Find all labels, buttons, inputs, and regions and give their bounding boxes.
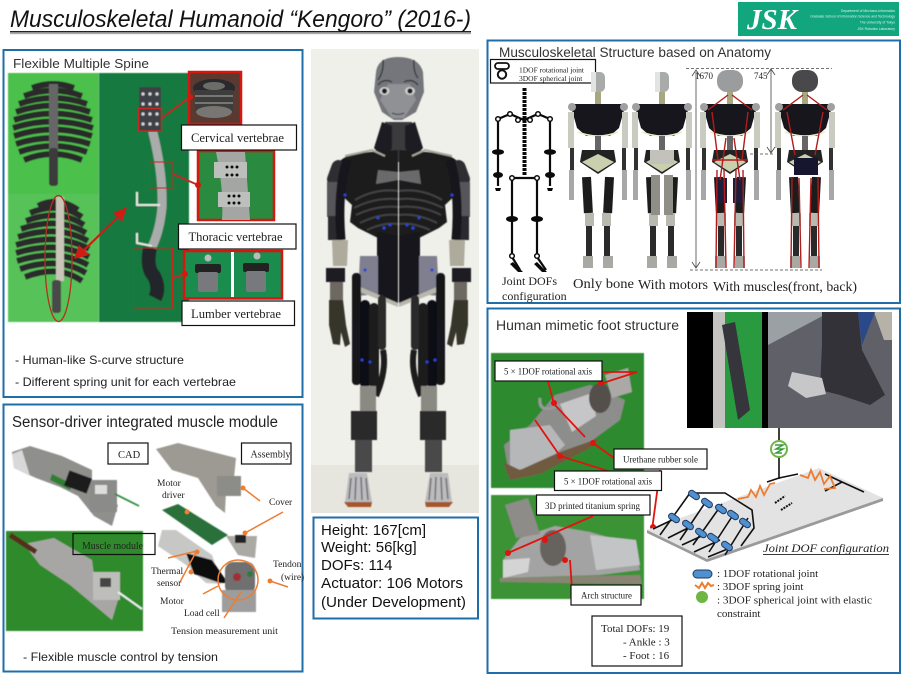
photo: foot side view bbox=[491, 495, 644, 599]
labels: dimensions: 1670 bbox=[695, 71, 714, 81]
label: arch structure: Arch structure bbox=[581, 592, 632, 602]
label: CAD bbox=[108, 443, 148, 464]
label: assembly bbox=[242, 443, 291, 464]
labels: component names: sensor bbox=[157, 579, 182, 589]
labels: component names: Motor bbox=[160, 597, 185, 607]
label: 5x1DOF rotational axis (upper): 5 × 1DOF rotational axis bbox=[504, 368, 592, 378]
label: urethane rubber sole bbox=[614, 449, 707, 469]
callouts: red leader lines bbox=[505, 372, 660, 590]
heading: anatomy: Musculoskeletal Structure based on Anatomy bbox=[499, 45, 771, 60]
label: total DOFs: Total DOFs: 19 bbox=[601, 623, 670, 635]
model: only bone bbox=[568, 72, 628, 268]
exploded assembly drawing bbox=[156, 443, 257, 612]
dimension lines bbox=[686, 68, 832, 270]
logo: JSK: JSK Robotics Laboratory bbox=[857, 27, 895, 31]
text: legend entries: : 3DOF spherical joint with elastic bbox=[717, 594, 872, 606]
label: lumber vertebrae: Lumber vertebrae bbox=[191, 307, 281, 321]
inset: cervical vertebra bbox=[187, 72, 241, 124]
text: legend entries: constraint bbox=[717, 608, 760, 620]
logo: JSK: JSK bbox=[746, 4, 799, 36]
panel: musculoskeletal structure based on anatomy bbox=[488, 40, 900, 303]
heading: muscle module: Sensor-driver integrated muscle module bbox=[12, 414, 278, 431]
model: with motors bbox=[632, 72, 692, 268]
labels: model captions: Only bone bbox=[573, 276, 634, 291]
text: muscle bullet: - Flexible muscle control by tension bbox=[23, 650, 218, 664]
label: assembly: Assembly bbox=[250, 450, 290, 460]
labels: dimensions bbox=[695, 71, 768, 81]
panel: robot specifications: Height: 167[cm] bbox=[321, 522, 426, 539]
label: cervical vertebrae bbox=[182, 125, 296, 150]
panel: human mimetic foot structure bbox=[488, 308, 900, 673]
label: muscle module bbox=[73, 534, 155, 554]
heading: spine: Flexible Multiple Spine bbox=[13, 56, 149, 71]
labels: component names bbox=[151, 479, 304, 637]
label: muscle module: Muscle module bbox=[82, 541, 143, 552]
icon: 1DOF rotational joint bbox=[693, 570, 712, 578]
photo: rib cages on green bbox=[8, 73, 99, 322]
label: 5x1DOF rotational axis (lower): 5 × 1DOF rotational axis bbox=[564, 478, 652, 488]
photo: Kengoro robot bbox=[311, 49, 479, 513]
CAD render of module bbox=[12, 446, 139, 526]
label: cervical vertebrae: Cervical vertebrae bbox=[191, 131, 284, 145]
photo: spine on dark green bbox=[99, 73, 189, 322]
labels: model captions: configuration bbox=[502, 289, 567, 303]
icon: 3DOF spring joint bbox=[695, 583, 714, 588]
title: Musculoskeletal Humanoid “Kengoro” (2016-) bbox=[10, 6, 471, 33]
text: legend entries: : 3DOF spring joint bbox=[717, 581, 803, 593]
labels: model captions: Joint DOFs bbox=[502, 274, 557, 288]
callouts: orange leader lines bbox=[168, 486, 288, 618]
label: thoracic vertebrae: Thoracic vertebrae bbox=[188, 230, 283, 244]
logo: JSK: Graduate School of Information Science and Technology bbox=[810, 14, 895, 18]
callout: red selection marks bbox=[45, 97, 198, 322]
legend: joint types bbox=[693, 568, 872, 620]
robot: left half body bbox=[325, 122, 399, 507]
text: spine bullet points bbox=[15, 353, 236, 389]
label: 5x1DOF rotational axis (lower) bbox=[554, 471, 662, 490]
panel: robot specifications bbox=[314, 518, 478, 618]
diagram: joint DOF stick figure bbox=[492, 88, 556, 272]
diagram: foot joint DOF configuration bbox=[647, 428, 883, 562]
labels: component names: (wire) bbox=[281, 572, 304, 583]
label: thoracic vertebrae bbox=[178, 224, 296, 249]
label: 5x1DOF rotational axis (upper) bbox=[495, 361, 602, 381]
text: spine bullet points: - Different spring unit for each vertebrae bbox=[15, 375, 236, 389]
label: lumber vertebrae bbox=[182, 301, 294, 326]
legend: joint symbols: 1DOF rotational joint bbox=[519, 66, 585, 74]
photo: foot upper view bbox=[491, 353, 644, 488]
labels: component names: Tendon bbox=[273, 560, 302, 570]
label: total DOFs: - Foot : 16 bbox=[623, 650, 670, 662]
label: CAD: CAD bbox=[118, 450, 141, 461]
inset: lumbar vertebra bbox=[182, 251, 282, 298]
labels: model captions: With muscles(front, back) bbox=[713, 279, 857, 294]
text: legend entries bbox=[717, 568, 872, 620]
labels: component names: Thermal bbox=[151, 567, 184, 577]
arrow: ribcage to spine bbox=[74, 207, 127, 259]
panel: robot specifications: Actuator: 106 Motors bbox=[321, 575, 463, 592]
labels: dimensions: 745 bbox=[754, 71, 768, 81]
panel: robot specifications: (Under Development) bbox=[321, 594, 466, 611]
labels: component names: Cover bbox=[269, 498, 293, 508]
label: total DOFs bbox=[592, 616, 682, 666]
legend: joint symbols: 3DOF spherical joint bbox=[519, 74, 583, 83]
label: urethane rubber sole: Urethane rubber sole bbox=[623, 456, 698, 466]
model: with muscles front bbox=[700, 70, 760, 268]
labels: component names: Tension measurement unit bbox=[171, 627, 278, 637]
labels: component names: Motor bbox=[157, 479, 182, 489]
panel: flexible multiple spine bbox=[4, 50, 302, 397]
logo: JSK: Department of Mechano-Informatics bbox=[841, 9, 895, 13]
panel: sensor-driver integrated muscle module bbox=[4, 404, 304, 672]
caption: joint DOF configuration: Joint DOF configuration bbox=[763, 543, 889, 555]
inset: thoracic vertebra bbox=[195, 151, 274, 220]
labels: component names: Load cell bbox=[184, 609, 220, 619]
labels: model captions bbox=[502, 274, 857, 303]
legend: joint symbols bbox=[490, 60, 596, 83]
text: spine bullet points: - Human-like S-curve structure bbox=[15, 353, 184, 367]
heading: foot: Human mimetic foot structure bbox=[496, 318, 679, 333]
model: with muscles back bbox=[775, 70, 835, 268]
photo: real muscle module bbox=[6, 531, 143, 631]
logo: JSK bbox=[738, 2, 899, 36]
label: total DOFs: - Ankle : 3 bbox=[623, 636, 670, 648]
label: 3D printed titanium spring bbox=[536, 495, 650, 515]
panel: robot specifications: Weight: 56[kg] bbox=[321, 539, 417, 556]
photos: standing robot and foot on carpet bbox=[687, 312, 892, 428]
logo: JSK: The University of Tokyo bbox=[860, 20, 895, 24]
text: legend entries: : 1DOF rotational joint bbox=[717, 568, 818, 580]
panel: robot specifications: DOFs: 114 bbox=[321, 557, 392, 574]
labels: model captions: With motors bbox=[638, 277, 708, 292]
icon: 3DOF spherical joint bbox=[696, 591, 708, 603]
label: 3D printed titanium spring: 3D printed titanium spring bbox=[545, 502, 640, 512]
labels: component names: driver bbox=[162, 491, 186, 501]
label: arch structure bbox=[571, 585, 641, 605]
